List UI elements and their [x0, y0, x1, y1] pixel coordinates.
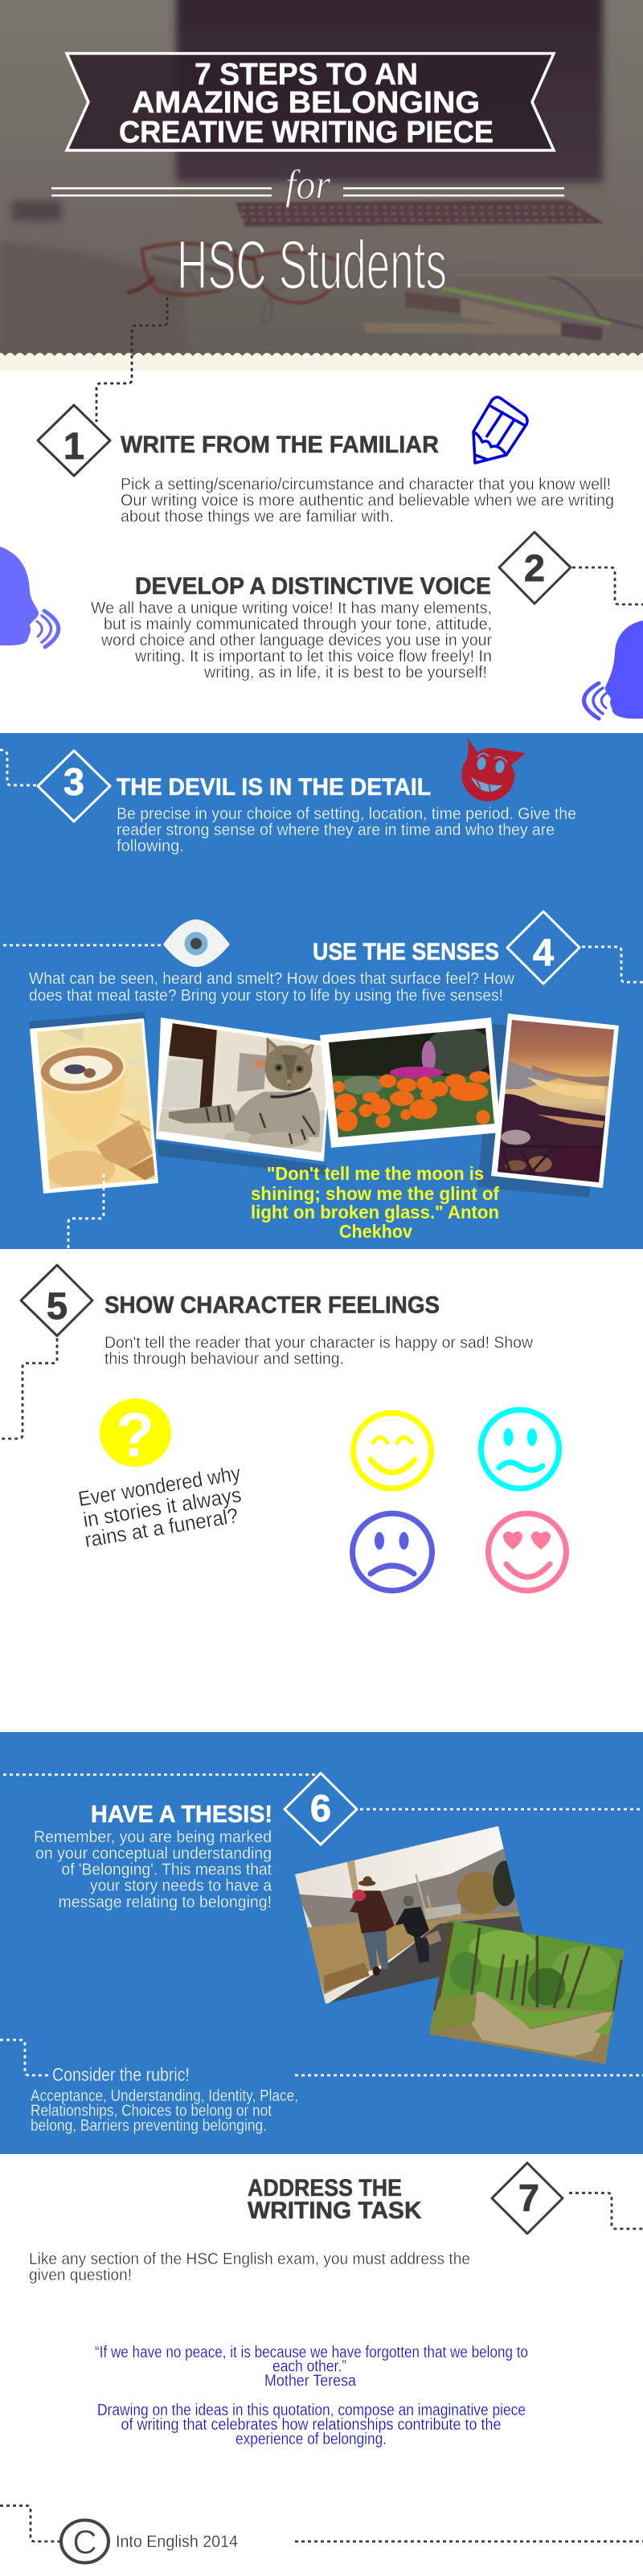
quotation: light on broken glass." Anton	[251, 1202, 499, 1222]
icon: sad smiley	[352, 1513, 432, 1591]
step 3 diamond	[38, 751, 110, 821]
dotted connector from coffee photo	[68, 1174, 104, 1249]
step 7 diamond: 7	[518, 2177, 539, 2219]
quotation	[251, 1163, 499, 1242]
exam quotation: Mother Teresa	[264, 2373, 357, 2390]
step 2 body: but is mainly communicated through your tone, attitude,	[104, 616, 492, 633]
step 2 body: word choice and other language devices you use in your	[100, 632, 492, 649]
step 3 body: reader strong sense of where they are in time and who they are	[117, 821, 555, 839]
rubric heading: Consider the rubric!	[52, 2064, 190, 2085]
step 6 body: on your conceptual understanding	[35, 1845, 272, 1863]
step 6 body: Remember, you are being marked	[34, 1829, 272, 1846]
title text: AMAZING BELONGING	[132, 86, 480, 120]
title text: 7 STEPS TO AN	[195, 58, 418, 92]
step 2 body	[91, 600, 492, 682]
step 5 heading: SHOW CHARACTER FEELINGS	[104, 1292, 440, 1318]
step 6 body: of 'Belonging'. This means that	[61, 1861, 272, 1879]
rubric body	[31, 2087, 298, 2135]
step 5 panel	[0, 1265, 566, 1591]
rotated question: rains at a funeral?	[83, 1503, 240, 1552]
step 7 heading: ADDRESS THE	[248, 2175, 402, 2201]
title text: CREATIVE WRITING PIECE	[119, 116, 494, 149]
step 1 body	[121, 476, 614, 526]
step 1 body: Our writing voice is more authentic and believable when we are writing	[121, 492, 614, 510]
quotation: Chekhov	[339, 1221, 412, 1242]
rotated question: Ever wondered why	[76, 1460, 242, 1511]
step 3 diamond: 3	[63, 760, 84, 803]
step 7 body: Like any section of the HSC English exam, you must address the	[29, 2250, 470, 2268]
quotation: shining; show me the glint of	[251, 1183, 499, 1204]
step 7 dotted connector	[569, 2193, 643, 2229]
step 3 heading: THE DEVIL IS IN THE DETAIL	[117, 774, 431, 801]
step 4 body	[29, 970, 515, 1005]
photo: forest forked path	[428, 1919, 627, 2067]
subtitle: HSC Students	[177, 227, 447, 304]
step 3 dotted connector	[0, 750, 38, 785]
step 2 body: We all have a unique writing voice! It has many elements,	[91, 600, 492, 617]
title banner	[67, 53, 554, 150]
step 7 body: given question!	[29, 2267, 132, 2284]
scalloped edge	[0, 350, 643, 371]
dotted connector: hero to step 1	[96, 297, 167, 422]
step 6 diamond	[285, 1773, 357, 1845]
icon: in-love smiley	[489, 1513, 566, 1591]
step 5 diamond: 5	[47, 1284, 68, 1327]
step 4 body: does that meal taste? Bring your story to life by using the five senses!	[29, 987, 503, 1005]
icon: copyright: C	[72, 2523, 97, 2561]
icon: worried smiley	[481, 1410, 559, 1489]
icon: speaking head left	[0, 547, 59, 647]
step 4 diamond	[507, 911, 580, 984]
rubric body: Relationships, Choices to belong or not	[31, 2103, 272, 2120]
icon: question mark: ?	[116, 1399, 154, 1470]
exam quotation	[95, 2344, 528, 2448]
step 4 dotted connector left	[3, 944, 163, 946]
step 4 heading: USE THE SENSES	[313, 939, 499, 965]
step 2 body: writing. It is important to let this voice flow freely! In	[134, 648, 492, 666]
step 5 body	[104, 1334, 534, 1368]
hero blurred desk photo	[0, 0, 643, 358]
rubric body: Acceptance, Understanding, Identity, Place,	[31, 2087, 298, 2105]
step 6 heading: HAVE A THESIS!	[91, 1801, 272, 1828]
for divider: for	[285, 162, 331, 208]
step 4 diamond: 4	[533, 931, 554, 973]
step 6 dotted lines	[0, 1775, 643, 2075]
step 2 dotted connector	[572, 567, 643, 604]
rotated question	[76, 1460, 243, 1552]
step 5 dotted connector	[0, 1338, 57, 1439]
step 1 diamond: 1	[63, 424, 84, 467]
rubric body: belong, Barriers preventing belonging.	[31, 2117, 267, 2135]
icon: copyright	[61, 2521, 109, 2562]
step 4 body: What can be seen, heard and smelt? How does that surface feel? How	[29, 970, 515, 988]
exam quotation: Drawing on the ideas in this quotation, compose an imaginative piece	[97, 2402, 526, 2419]
photo: sunset	[491, 1014, 619, 1188]
step 1 diamond	[38, 405, 110, 476]
footer dotted lines	[0, 2506, 643, 2541]
step 2 panel	[0, 532, 643, 719]
step 3 body: following.	[117, 838, 184, 855]
step 1 body: Pick a setting/scenario/circumstance and character that you know well!	[121, 476, 611, 493]
step 5 body: this through behaviour and setting.	[104, 1350, 344, 1368]
step 6 body: your story needs to have a	[90, 1878, 272, 1895]
step 2 heading: DEVELOP A DISTINCTIVE VOICE	[135, 573, 491, 600]
photo shadows	[29, 1012, 605, 1198]
footer credit: Into English 2014	[116, 2533, 238, 2551]
title text	[119, 58, 494, 149]
step 2 body: writing, as in life, it is best to be yourself!	[203, 664, 487, 682]
step 1 panel	[38, 397, 614, 526]
icon: question mark	[100, 1399, 171, 1470]
step 7 heading	[248, 2175, 422, 2224]
step 5 body: Don't tell the reader that your character is happy or sad! Show	[104, 1334, 534, 1352]
quotation: "Don't tell me the moon is	[267, 1163, 484, 1184]
photo: coffee	[30, 1017, 163, 1196]
step 2 diamond: 2	[524, 547, 545, 589]
photo: tulips	[320, 1018, 501, 1148]
step 5 diamond	[21, 1265, 92, 1336]
step 4 dotted connector right	[582, 947, 643, 982]
step 6 body: message relating to belonging!	[58, 1894, 272, 1911]
step 6 diamond: 6	[310, 1787, 331, 1829]
hero panel	[0, 0, 643, 371]
icon: happy smiley	[354, 1413, 431, 1489]
exam quotation: experience of belonging.	[235, 2431, 387, 2448]
step 6 blue panel	[0, 1732, 643, 2154]
icon: devil	[461, 738, 526, 801]
step 6 body	[34, 1829, 272, 1911]
step 1 body: about those things we are familiar with.	[121, 508, 394, 526]
blue panel: steps 3 and 4	[0, 733, 643, 1249]
exam quotation: of writing that celebrates how relationships contribute to the	[121, 2416, 502, 2434]
rotated question: in stories it always	[81, 1482, 243, 1532]
icon: speaking head right	[584, 620, 643, 719]
icon: pencil	[473, 397, 527, 463]
icon: eye	[163, 919, 230, 967]
step 3 body	[117, 805, 576, 855]
step 7 panel	[0, 2163, 643, 2562]
step 7 heading: WRITING TASK	[248, 2197, 422, 2224]
step 7 body	[29, 2250, 470, 2284]
photo: father and son walking	[292, 1823, 530, 2008]
step 7 diamond	[492, 2163, 563, 2234]
step 2 diamond	[499, 532, 571, 604]
photo: cat	[155, 1017, 338, 1167]
step 3 body: Be precise in your choice of setting, location, time period. Give the	[117, 805, 576, 823]
exam quotation: each other.”	[272, 2358, 346, 2376]
exam quotation: “If we have no peace, it is because we have forgotten that we belong to	[95, 2344, 528, 2361]
step 1 heading: WRITE FROM THE FAMILIAR	[121, 432, 439, 458]
